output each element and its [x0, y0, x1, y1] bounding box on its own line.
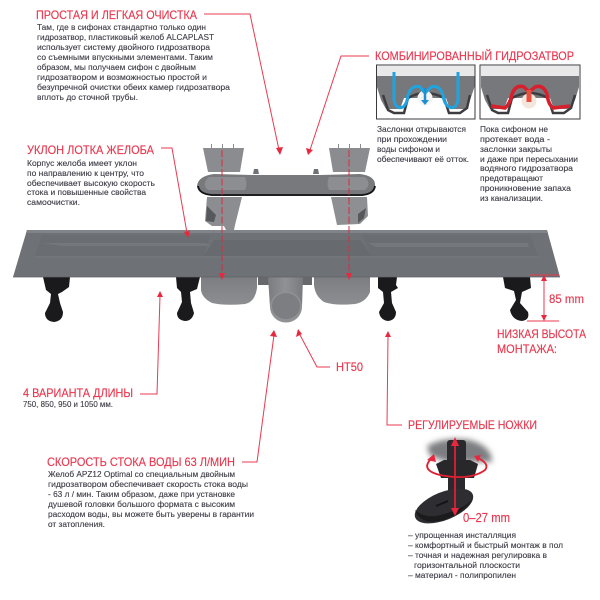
arrow: length variants leader	[140, 291, 163, 394]
heading: tray slope: УКЛОН ЛОТКА ЖЕЛОБА	[27, 143, 154, 157]
text block: tray slope: по направлению к центру, что	[27, 168, 144, 178]
text block: open trap caption: воды сифоном и	[377, 144, 440, 154]
heading: four lengths: 4 ВАРИАНТА ДЛИНЫ	[23, 386, 133, 400]
arrow: easy cleaning leader	[204, 14, 283, 155]
text block: easy cleaning	[37, 22, 230, 102]
text block: closed trap caption: из канализации.	[480, 193, 543, 203]
right lower insert body	[331, 197, 368, 225]
right insert grid	[329, 144, 370, 172]
heading: low installation height: МОНТАЖА:	[497, 342, 557, 356]
text block: feet features list: – комфортный и быстрый монтаж в пол	[408, 540, 563, 550]
text block: flow speed: душевой головки большого формата с высоким	[48, 499, 235, 509]
text block: flow speed	[48, 469, 254, 529]
arrow: tray slope leader	[161, 148, 190, 238]
arrow: right insert dashed	[346, 150, 352, 280]
icon: adjustable foot with height and rotation arrows: 0–27 mm	[463, 510, 510, 525]
text block: lengths: 750, 850, 950 и 1050 мм.	[23, 400, 113, 409]
text block: easy cleaning: вплоть до сточной трубы.	[37, 92, 138, 102]
heading: low installation height: НИЗКАЯ ВЫСОТА	[497, 327, 586, 341]
left insert grid	[203, 144, 244, 172]
heading: adjustable feet: РЕГУЛИРУЕМЫЕ НОЖКИ	[408, 418, 537, 432]
foot: outer right	[503, 277, 531, 321]
text block: flow speed: - 63 л / мин. Таким образом, даже при установке	[48, 489, 235, 499]
drain pipe HT50	[268, 277, 303, 322]
left lower insert body	[205, 197, 242, 230]
text block: flow speed: расходом воды, вы можете быть уверены в гарантии	[48, 509, 254, 519]
text block: closed trap caption: и даже при пересыхании	[480, 154, 578, 164]
text block: closed trap caption: водяного гидрозатвора	[480, 163, 573, 173]
arrow: flow speed leader	[242, 330, 277, 462]
panel: closed trap with dry seal	[480, 65, 580, 119]
arrow: left insert dashed	[219, 150, 225, 280]
lower siphon bodies	[201, 276, 370, 305]
heading: combined trap: КОМБИНИРОВАННЫЙ ГИДРОЗАТВОР	[375, 48, 574, 63]
text block: flow speed: гидрозатвором обеспечивает скорость стока воды	[48, 479, 248, 489]
cover plate	[197, 174, 375, 196]
text block: closed trap caption: проникновение запаха	[480, 183, 571, 193]
foot: outer left	[43, 277, 70, 322]
foot: inner left	[176, 277, 200, 321]
text block: feet features list: горизонтальной плоскости	[414, 560, 520, 570]
upper siphon inserts and cover	[197, 144, 375, 230]
panel: open trap with water flow	[376, 65, 475, 119]
text block: closed trap caption	[480, 124, 578, 203]
arrow: HT50 leader	[296, 329, 330, 367]
text block: tray slope	[27, 158, 156, 207]
text block: open trap caption: при прохождении	[377, 134, 447, 144]
icon: adjustable foot with height and rotation arrows	[410, 437, 510, 531]
heading: easy cleaning: ПРОСТАЯ И ЛЕГКАЯ ОЧИСТКА	[36, 8, 197, 22]
text block: feet features list	[408, 530, 563, 580]
heading: low installation height	[497, 327, 586, 356]
text block: feet features list: – точная и надежная регулировка в	[408, 550, 547, 560]
label: HT50: HT50	[336, 360, 363, 374]
text block: easy cleaning: со съемными впускными элементами. Таким	[37, 52, 213, 62]
drain channel tray	[13, 230, 560, 277]
text block: tray slope: самоочистки.	[27, 197, 80, 207]
text block: easy cleaning: Там, где в сифонах стандартно только один	[37, 22, 206, 32]
text block: easy cleaning: образом, мы получаем сифон с двойным	[37, 62, 196, 72]
text block: tray slope: стока и повышенные свойства	[27, 187, 146, 197]
dimension: 85 mm: 85 mm	[549, 292, 584, 306]
text block: easy cleaning: использует систему двойного гидрозатвора	[37, 42, 210, 52]
text block: tray slope: Корпус желоба имеет уклон	[27, 158, 137, 168]
text block: tray slope: обеспечивает высокую скорость	[27, 178, 156, 188]
text block: open trap caption: обеспечивают её отток.	[377, 154, 469, 164]
heading: flow speed: СКОРОСТЬ СТОКА ВОДЫ 63 Л/МИН	[47, 455, 235, 469]
arrow: combined trap leader	[306, 56, 369, 155]
text block: easy cleaning: безупречной очистки обеих камер гидрозатвора	[37, 82, 230, 92]
text block: closed trap caption: заслонки закрыты	[480, 144, 552, 154]
text block: closed trap caption: предотвращают	[480, 173, 543, 183]
text block: flow speed: от затопления.	[48, 519, 105, 529]
text block: feet features list: – материал - полипропилен	[408, 570, 516, 580]
text block: feet features list: – упрощенная инсталляция	[408, 530, 516, 540]
text block: open trap caption: Заслонки открываются	[377, 124, 466, 134]
text block: easy cleaning: гидрозатвором и возможностью простой и	[37, 72, 207, 82]
text block: open trap caption	[377, 124, 469, 164]
dimension: 85 mm	[527, 275, 584, 321]
text block: flow speed: Желоб APZ12 Optimal со специальным двойным	[48, 469, 235, 479]
arrow: adjustable feet leader	[385, 331, 402, 425]
text block: closed trap caption: протекает вода -	[480, 134, 550, 144]
foot: inner right	[378, 277, 398, 321]
text block: closed trap caption: Пока сифоном не	[480, 124, 548, 134]
text block: easy cleaning: гидрозатвор, пластиковый желоб ALCAPLAST	[37, 32, 215, 42]
